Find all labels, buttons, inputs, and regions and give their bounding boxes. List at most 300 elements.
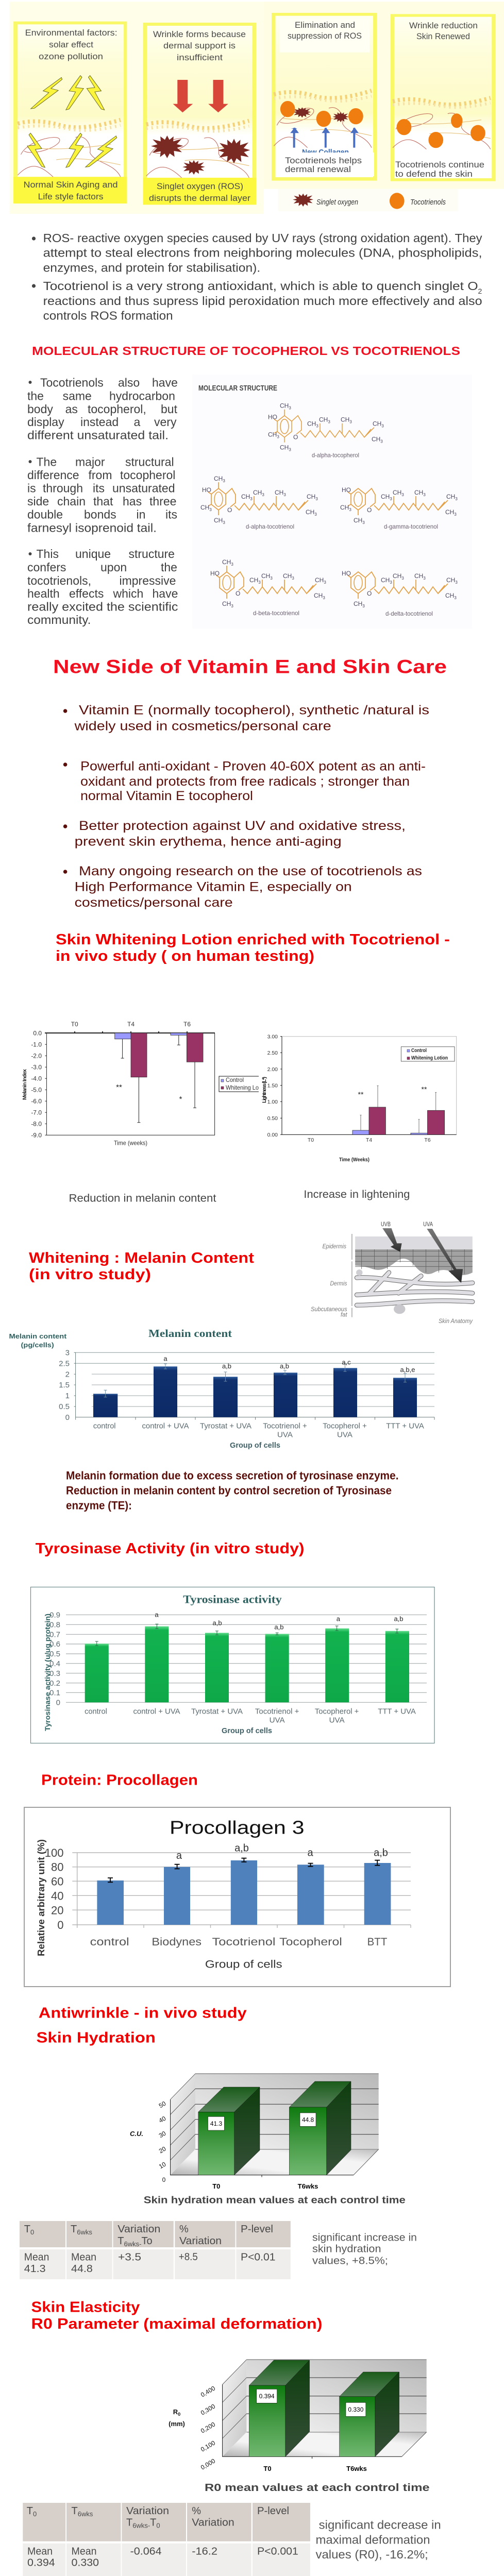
heading: skin whitening lotion [56,931,450,964]
chart: skin hydration 3D [130,2074,379,2190]
text block: molecular structure bullets: community. [27,613,91,626]
chart: R0 3D: T0 [263,2465,272,2472]
chart: tyrosinase activity: control + UVA [133,1707,180,1716]
card: elimination of ROS [272,13,377,181]
table: R0: T [27,2505,33,2517]
molecule: d-delta-tocotrienol: 3 [401,576,404,581]
text block: molecular structure bullets: three [149,495,176,508]
chart: lightness: T0 [308,1137,314,1143]
text block: molecular structure bullets: structural [125,455,174,468]
chart: melanin index: Time (weeks) [114,1140,147,1147]
molecule: d-alpha-tocotrienol: 3 [283,493,286,497]
figure: skin anatomy: UVB [381,1221,391,1228]
table: skin hydration: Variation [179,2235,222,2247]
text block: molecular structure bullets: but [161,402,178,416]
molecule: d-alpha-tocopherol [268,402,384,459]
molecule: d-alpha-tocopherol: CH [373,420,381,428]
molecule: d-delta-tocotrienol: CH [445,592,454,599]
molecule: d-alpha-tocotrienol: 3 [209,507,212,512]
bars: whitening lotion [369,1107,445,1134]
chart: procollagen 3: Biodynes [152,1936,201,1948]
legend: Control [411,1048,427,1054]
bars: control [352,1130,428,1134]
table: skin hydration: 44.8 [71,2263,93,2275]
chart: tyrosinase activity: 0.7 [49,1630,60,1639]
caption: R0 mean values: R0 mean values at each control time [205,2482,430,2494]
value annotations: a [155,1611,159,1618]
caption: reduction in melanin content: Reduction in melanin content [69,1193,216,1205]
molecule: d-alpha-tocotrienol: 3 [314,512,317,517]
chart: melanin index: -9.0 [31,1131,42,1139]
table: skin hydration: Mean [71,2252,96,2263]
chart: melanin content: TTT + UVA [386,1422,424,1431]
text block: R0 result: values (R0), -16.2%; [315,2548,428,2561]
molecule: d-alpha-tocotrienol: CH [307,493,315,500]
molecule: d-gamma-tocotrienol [340,486,458,530]
chart: tyrosinase activity: Tocopherol + [315,1707,359,1716]
molecule: d-alpha-tocopherol: CH [307,420,316,428]
table: R0: 6wks [78,2510,93,2518]
text block: molecular structure bullets: confers [27,561,66,574]
table: R0 [23,2503,310,2576]
text block: molecular structure bullets: the [27,389,44,403]
table: skin hydration: 0 [30,2228,34,2236]
table: R0: T [126,2517,132,2529]
text block: molecular structure bullets: a [134,415,140,429]
chart: melanin content [9,1327,434,1450]
chart: tyrosinase activity: Group of cells [222,1726,272,1735]
table: skin hydration: 6wks [77,2228,92,2236]
card: wrinkle reduction [391,14,496,181]
text block: molecular structure bullets: health [27,587,60,600]
card: environmental factors [13,22,127,204]
chart: procollagen 3: 80 [51,1861,64,1874]
text block: molecular structure bullets: through [43,482,83,495]
molecule: d-beta-tocotrienol: CH [249,577,258,584]
chart: procollagen 3: control [90,1936,129,1948]
text block: ROS bullets: reactions and thus supress lipid peroxidation much more effectively and also [43,294,482,308]
chart: melanin content: UVA [277,1430,293,1439]
table: skin hydration: 6wks- [124,2240,141,2248]
molecule: d-delta-tocotrienol: O [367,590,372,597]
molecule: d-beta-tocotrienol: CH [283,572,292,580]
molecule: d-delta-tocotrienol [342,570,458,617]
chart: tyrosinase activity: 0.1 [49,1689,60,1697]
bar: T0 [198,2087,260,2175]
chart: R0 3D: R [173,2408,178,2416]
chart: lightness: Lightness (L*) [261,1077,267,1103]
molecule: d-beta-tocotrienol: 3 [324,580,326,585]
text block: molecular structure bullets: bonds [84,508,116,521]
chart: tyrosinase activity: Tyrostat + UVA [191,1707,243,1716]
text block: vitamin E bullets: prevent skin erythema, hence anti-aging [75,835,342,849]
card: wrinkle reduction: to defend the skin [395,169,473,179]
error bars [104,1364,407,1397]
molecule: d-delta-tocotrienol: HO [342,570,351,577]
molecule: d-gamma-tocotrienol: HO [342,486,351,494]
text block: molecular structure bullets: body [27,402,53,416]
value annotations [176,1842,388,1861]
chart: tyrosinase activity: Tocotrienol + [255,1707,299,1716]
text block: molecular structure bullets: has [123,495,142,508]
molecule: d-beta-tocotrienol: 3 [231,604,233,608]
chart: procollagen 3: BTT [367,1936,388,1948]
chart: procollagen 3: Relative arbitrary unit (%) [36,1839,46,1956]
molecule: d-beta-tocotrienol: d-beta-tocotrienol [253,609,299,617]
chart: R0 3D: 0,000 [199,2457,216,2471]
bars [97,1860,391,1925]
molecule: d-alpha-tocotrienol: 3 [315,497,318,501]
chart: skin hydration 3D: 40 [158,2114,167,2124]
text block: molecular structure bullets: tocopherol [120,468,175,482]
chart: R0 3D: 0,300 [199,2402,216,2417]
molecule: d-beta-tocotrienol: 3 [258,580,261,585]
chart: melanin content: Melanin content [9,1332,67,1340]
molecule: d-alpha-tocotrienol: CH [200,504,209,511]
card: environmental factors: Life style factors [38,192,104,201]
chart: R0 3D: (mm) [169,2420,185,2428]
card: wrinkle reduction: Skin Renewed [416,31,470,41]
text block: molecular structure bullets: major [75,455,105,468]
text block: molecular structure bullets: its [165,508,177,521]
heading: molecular structure: MOLECULAR STRUCTURE OF TOCOPHEROL VS TOCOTRIENOLS [32,344,460,358]
text block: vitamin E bullets: normal Vitamin E tocopherol [80,789,253,803]
value annotations: a,b [222,1362,231,1370]
figure: skin anatomy: fat [341,1311,347,1318]
chart: tyrosinase activity: Tyrosinase activity (u/ug protein) [43,1614,52,1731]
text block: molecular structure bullets: unsaturated [112,482,175,495]
heading: skin elasticity [31,2299,323,2332]
chart: melanin index: T4 [127,1021,135,1028]
molecule: d-beta-tocotrienol: CH [261,572,270,580]
table: R0: % [192,2505,201,2517]
molecule: d-delta-tocotrienol: 3 [454,596,457,600]
molecule: d-alpha-tocopherol: 3 [316,424,318,429]
heading: skin whitening lotion: Skin Whitening Lotion enriched with Tocotrienol - [56,931,450,948]
chart: skin hydration 3D: T6wks [298,2182,318,2190]
table: R0: T [71,2505,78,2517]
text block: R0 result: significant decrease in [319,2518,441,2531]
chart: lightness: 0.00 [267,1132,278,1138]
chart: lightness: ** [358,1090,364,1098]
table: R0: 0.330 [71,2557,99,2569]
molecule: d-alpha-tocopherol: CH [341,416,349,423]
chart: skin hydration 3D: 0 [162,2176,166,2183]
text block: molecular structure bullets: chain [57,495,86,508]
text block: molecular structure bullets [27,376,178,626]
chart: tyrosinase activity: 0.8 [49,1621,60,1629]
heading: whitening melanin content: (in vitro study) [29,1266,151,1283]
chart: melanin index: -3.0 [31,1063,42,1071]
molecule: d-beta-tocotrienol: CH [222,600,231,607]
card: wrinkle reduction: Tocotrienols continue [395,160,484,170]
text block: molecular structure bullets: tocotrienols, [27,574,91,587]
molecule: d-alpha-tocopherol: CH [280,444,289,451]
chart: melanin content: 0 [65,1413,70,1422]
chart: skin hydration 3D: C.U. [130,2130,143,2138]
molecule: d-beta-tocotrienol: CH [315,577,324,584]
figure: skin anatomy: Epidermis [323,1243,346,1250]
panel: molecular structure figure [192,375,472,629]
chart: lightness [261,1033,457,1163]
card: elimination of ROS: suppression of ROS [288,31,362,41]
table: R0: P<0.001 [257,2546,298,2557]
chart: tyrosinase activity: 0.2 [49,1679,60,1688]
molecule: d-gamma-tocotrienol: 3 [455,497,458,501]
chart: tyrosinase activity: UVA [329,1716,345,1724]
table: skin hydration [20,2221,291,2279]
card: wrinkle forms: disrupts the dermal layer [149,193,250,203]
text block: ROS bullets: controls ROS formation [43,309,173,323]
bars [93,1366,417,1417]
chart: melanin index: -1.0 [31,1041,42,1048]
molecule: d-alpha-tocopherol: CH [268,431,277,438]
text block: molecular structure bullets: that [93,495,113,508]
card: elimination of ROS: New Collagen [302,148,349,157]
chart: R0 3D: T6wks [346,2465,367,2472]
molecule: d-gamma-tocotrienol: 3 [390,497,392,501]
molecule: d-alpha-tocotrienol: d-alpha-tocotrienol [246,523,294,530]
chart: tyrosinase activity: Tyrosinase activity [183,1593,282,1606]
value label: 44.8: 44.8 [302,2116,314,2124]
bars [85,1626,409,1702]
chart: tyrosinase activity: 0.4 [49,1659,60,1668]
table: R0: -0.064 [130,2546,162,2557]
legend [293,193,446,209]
molecule: d-delta-tocotrienol: 3 [362,604,365,608]
chart: melanin index: Melanin Index [22,1069,28,1100]
table: skin hydration: T [24,2224,30,2235]
molecule: d-gamma-tocotrienol: CH [354,517,362,524]
chart: melanin content: 0.5 [59,1402,70,1411]
text block: ROS bullets: Tocotrienol is a very strong antioxidant, which is able to quench singlet O [43,279,478,293]
table: skin hydration: +3.5 [118,2252,141,2263]
molecule: d-gamma-tocotrienol: 3 [362,520,365,525]
chart: procollagen 3: Tocopherol [279,1936,342,1948]
card: environmental factors: Environmental factors: [25,28,117,38]
table: R0: Variation [126,2505,169,2517]
chart: tyrosinase activity [31,1587,434,1743]
table: skin hydration: Variation [117,2224,160,2235]
table: R0: 0 [33,2510,37,2518]
gridlines [76,1352,434,1363]
chart: melanin content: control + UVA [142,1422,189,1431]
text block: hydration result: skin hydration [312,2244,381,2255]
caption: skin hydration mean values: Skin hydration mean values at each control time [144,2195,406,2206]
gridlines [66,1615,427,1702]
molecule: d-alpha-tocotrienol: CH [214,517,223,524]
text block: molecular structure bullets: difference [27,468,79,482]
value annotations: a,b [274,1623,283,1631]
chart: tyrosinase activity: UVA [270,1716,285,1724]
card: wrinkle forms: dermal support is [163,41,236,50]
chart: lightness: 2.00 [267,1066,278,1073]
figure: skin anatomy: Subcutaneous [311,1306,347,1313]
text block: molecular structure bullets: This [36,547,59,561]
text block: vitamin E bullets [63,703,429,910]
molecule: d-beta-tocotrienol: O [236,590,240,597]
chart: melanin index: -4.0 [31,1075,42,1082]
chart: skin hydration 3D: 50 [158,2099,167,2109]
chart: melanin content: 2.5 [59,1359,70,1368]
chart: melanin content: control [93,1422,116,1431]
value annotations [155,1611,404,1631]
panel background [10,2,504,214]
molecule: d-alpha-tocopherol: 3 [328,420,330,425]
chart: tyrosinase activity: 0.5 [49,1650,60,1658]
text block: ROS bullets: 2 [478,287,482,295]
value label: 0.394: 0.394 [259,2393,275,2400]
molecule: d-alpha-tocotrienol: CH [306,509,314,516]
molecule: d-alpha-tocotrienol [200,475,318,530]
value annotations: a,b [394,1615,404,1623]
chart walls [223,2360,427,2459]
error bars [360,1086,436,1133]
text block: melanin formation note: enzyme (TE): [66,1499,132,1512]
text block: molecular structure bullets: is [27,482,36,495]
table: R0: Mean [71,2546,97,2557]
chart: melanin index: * [179,1095,182,1104]
molecule: d-beta-tocotrienol: CH [314,592,323,599]
card: wrinkle reduction: Wrinkle reduction [409,21,478,30]
chart: melanin content: Tyrostat + UVA [200,1422,251,1431]
chart: lightness: 2.50 [267,1050,278,1056]
molecule: d-beta-tocotrienol [210,558,326,617]
table: R0: 6wks- [132,2522,150,2530]
legend: Whitening Lo [226,1084,259,1091]
text block: vitamin E bullets: oxidant and protects from free radicals ; stronger than [80,774,410,789]
text block: molecular structure bullets: hydrocarbon [109,389,175,403]
heading: skin whitening lotion: in vivo study ( on human testing) [56,948,314,964]
value label: 0.330: 0.330 [348,2406,364,2413]
legend: Control [226,1076,244,1083]
table: skin hydration: P-level [241,2224,273,2235]
value annotations: a [176,1850,182,1861]
value label: 44.8 [300,2113,316,2126]
chart: melanin content: Group of cells [230,1441,280,1450]
chart: skin hydration 3D: T0 [212,2182,220,2190]
molecule: d-alpha-tocopherol: 3 [349,420,352,425]
molecule: d-alpha-tocotrienol: 3 [223,479,225,483]
molecule: d-alpha-tocopherol: 3 [289,448,291,452]
text block: molecular structure bullets: instead [80,415,119,429]
heading: whitening melanin content [29,1250,254,1283]
heading: skin hydration: Skin Hydration [36,2029,156,2046]
molecule: d-delta-tocotrienol: CH [393,572,401,580]
heading: protein procollagen: Protein: Procollagen [41,1772,198,1788]
text block: molecular structure bullets: which [112,587,143,600]
text block: molecular structure bullets: side [27,495,49,508]
chart: melanin index [22,1021,259,1147]
chart: tyrosinase activity: 0 [56,1698,60,1707]
chart: lightness: 0.50 [267,1115,278,1122]
value annotations: a,b [374,1847,388,1858]
chart: melanin index: -6.0 [31,1097,42,1105]
chart: lightness: T4 [366,1137,372,1143]
text block: molecular structure bullets: from [89,468,112,482]
table: skin hydration: T [117,2235,124,2247]
text block: hydration result: significant increase in [312,2232,417,2243]
bar: T6wks [340,2372,399,2456]
molecule: d-gamma-tocotrienol: CH [445,509,454,516]
chart: skin hydration 3D: 20 [158,2145,167,2155]
table: R0: P-level [257,2505,289,2517]
value annotations: a,b [280,1362,289,1370]
value annotations [163,1355,415,1374]
panel: molecular structure figure: MOLECULAR STRUCTURE [198,384,277,393]
text block: molecular structure bullets: different unsaturated tail. [27,429,169,442]
chart: procollagen 3: 60 [51,1875,64,1888]
chart: tyrosinase activity: 0.9 [49,1611,60,1620]
table: skin hydration: +8.5 [179,2251,198,2263]
molecule: d-alpha-tocopherol: CH [319,416,328,423]
molecule: d-alpha-tocopherol: 3 [381,424,384,429]
molecule: d-gamma-tocotrienol: 3 [423,493,426,497]
molecule: d-beta-tocotrienol: 3 [231,562,233,567]
legend [219,1076,259,1092]
text block: molecular structure bullets: Tocotrienols [40,376,104,389]
molecule: d-alpha-tocotrienol: O [227,506,232,514]
chart: procollagen 3: 40 [51,1889,64,1902]
text block: hydration result: values, +8.5%; [312,2255,388,2266]
text block: vitamin E bullets: Better protection against UV and oxidative stress, [79,819,406,833]
value label: 41.3 [208,2116,224,2130]
value annotations: a [307,1847,313,1858]
chart: skin hydration 3D: 30 [158,2129,167,2139]
molecule: d-alpha-tocotrienol: HO [202,486,211,494]
molecule: d-alpha-tocopherol: CH [280,402,289,410]
heading: skin elasticity: Skin Elasticity [31,2299,140,2316]
chart: R0 3D [169,2360,427,2472]
molecule: d-gamma-tocotrienol: 3 [349,507,351,512]
molecule: d-alpha-tocopherol: O [293,434,298,441]
text block: molecular structure bullets: its [93,482,105,495]
figure: skin anatomy: UVA [423,1221,433,1228]
molecule: d-alpha-tocotrienol: 3 [223,520,225,525]
text block: molecular structure bullets: farnesyl isoprenoid tail. [27,521,157,534]
chart: R0 3D: 0,200 [199,2420,216,2435]
molecule: d-delta-tocotrienol: 3 [423,576,426,581]
table: R0: 0 [156,2522,160,2530]
chart: procollagen 3: 100 [45,1846,64,1859]
text block: molecular structure bullets: The [36,455,57,468]
table: skin hydration: To [141,2235,153,2247]
molecule: d-alpha-tocopherol: HO [268,414,277,421]
text block: melanin formation note: Reduction in melanin content by control secretion of Tyrosinase [66,1484,392,1497]
table: skin hydration: T [71,2224,77,2235]
card: wrinkle forms [143,23,256,205]
text block: vitamin E bullets: Vitamin E (normally tocopherol), synthetic /natural is [79,703,429,718]
table: R0: Variation [192,2517,234,2529]
text block: molecular structure bullets: have [152,376,178,389]
molecule: d-alpha-tocotrienol: 3 [250,497,253,501]
chart: melanin content: 2 [65,1370,70,1379]
molecule: d-alpha-tocopherol: CH [372,436,380,443]
chart: R0 3D: 0,400 [199,2384,216,2399]
table: R0: Mean [27,2546,53,2557]
molecule: d-alpha-tocopherol: 3 [277,435,279,439]
table: skin hydration: Mean [24,2252,49,2263]
molecule: d-delta-tocotrienol: CH [381,577,390,584]
table: skin hydration: P<0.01 [241,2252,275,2263]
text block: vitamin E bullets: cosmetics/personal care [75,895,233,910]
heading: skin elasticity: R0 Parameter (maximal deformation) [31,2316,323,2332]
figure: skin anatomy: Skin Anatomy [439,1317,473,1325]
molecule: d-delta-tocotrienol: CH [446,577,455,584]
molecule: d-gamma-tocotrienol: CH [393,489,401,496]
chart: melanin content: 1 [65,1392,70,1400]
panel: skin aging diagram [10,2,504,214]
